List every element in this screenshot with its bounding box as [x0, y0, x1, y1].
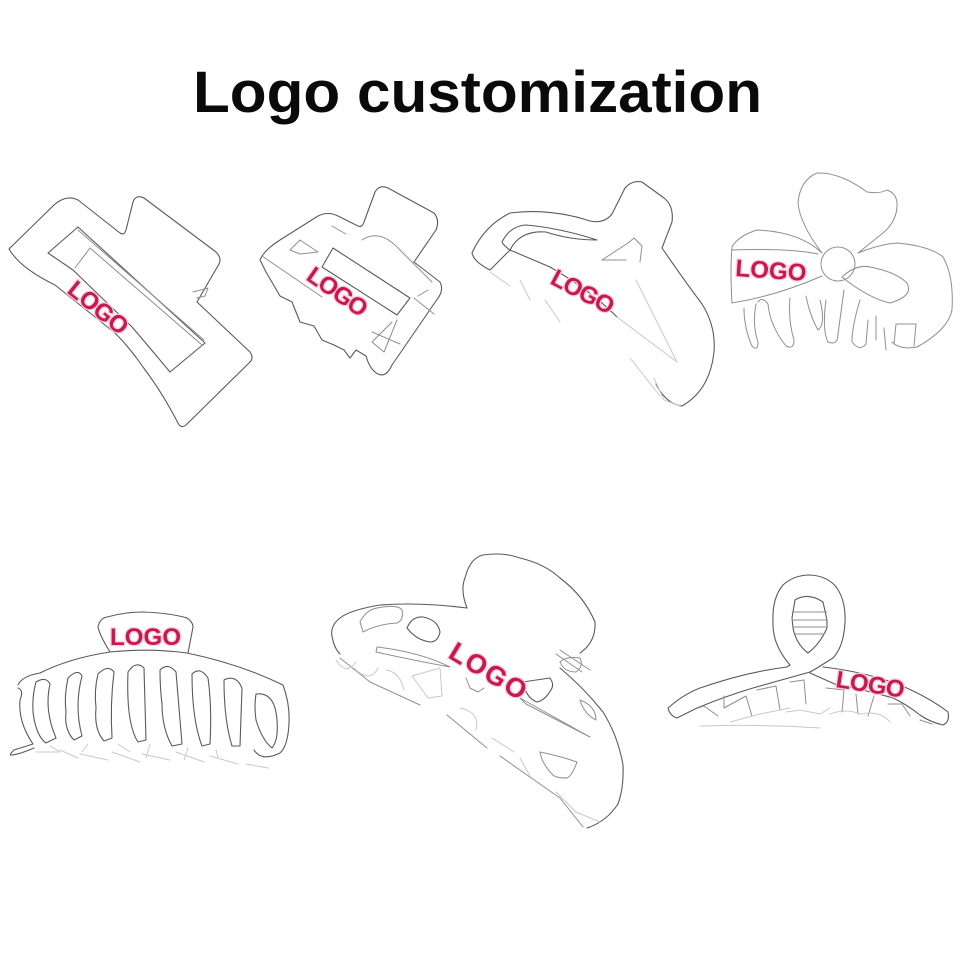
logo text: LOGO — [444, 636, 532, 706]
clip 5: long clip with many teeth — [10, 612, 289, 768]
clip 1: rectangular claw clip — [9, 197, 252, 427]
clip 2: square clip with teeth — [260, 187, 442, 375]
logo text: LOGO — [735, 255, 807, 287]
clip 6: large curved clip with round handle — [332, 554, 623, 828]
clip 7: loop handle clip — [668, 575, 948, 728]
logo text: LOGO — [302, 262, 373, 323]
title: Logo customization — [193, 60, 762, 125]
logo text: LOGO — [546, 264, 619, 320]
clip 3: curved clip with handle — [472, 182, 714, 406]
logo text: LOGO — [62, 276, 134, 341]
logo text: LOGO — [110, 624, 181, 651]
clip 4: bow clip — [731, 173, 952, 350]
logo text: LOGO — [834, 666, 906, 704]
